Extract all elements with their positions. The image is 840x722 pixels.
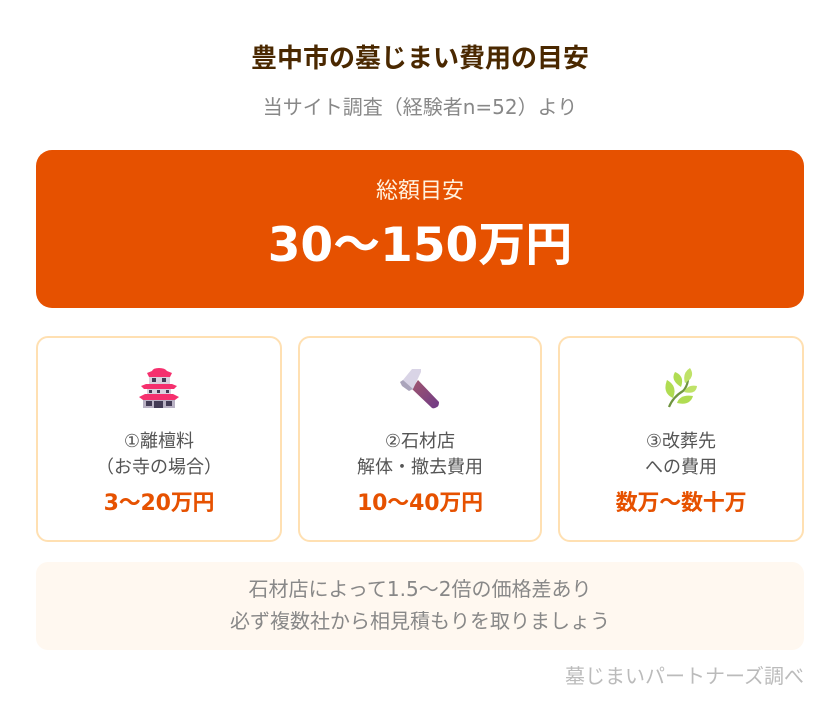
card 1 label (96, 431, 222, 478)
panel: card 2 stonemason (298, 336, 542, 542)
total label: 総額目安 (376, 179, 464, 204)
card 1 label: ①離檀料 (124, 431, 194, 452)
icon: herb (665, 368, 697, 408)
note text (230, 577, 610, 633)
total amount: 30〜150万円 (268, 218, 572, 273)
icon: hammer (400, 369, 439, 408)
card 3 amount: 数万〜数十万 (616, 491, 746, 516)
source credit: 墓じまいパートナーズ調べ (565, 664, 804, 688)
title: 豊中市の墓じまい費用の目安 (251, 44, 589, 74)
card 2 label (357, 431, 483, 478)
note text: 必ず複数社から相見積もりを取りましょう (230, 609, 610, 633)
card 1 label: （お寺の場合） (96, 457, 222, 478)
card 1 amount: 3〜20万円 (104, 491, 214, 516)
callout: price difference note (36, 562, 804, 650)
card 2 label: ②石材店 (385, 431, 455, 452)
panel: total estimate (36, 150, 804, 308)
panel: card 3 new resting place (558, 336, 804, 542)
subtitle: 当サイト調査（経験者n=52）より (263, 95, 577, 119)
panel: card 1 temple leaving fee (36, 336, 282, 542)
note text: 石材店によって1.5〜2倍の価格差あり (249, 577, 591, 601)
card 2 label: 解体・撤去費用 (357, 457, 483, 478)
card 2 amount: 10〜40万円 (357, 491, 483, 516)
icon: pagoda (139, 368, 179, 408)
card 3 label: ③改葬先 (646, 431, 716, 452)
card 3 label: への費用 (645, 457, 717, 478)
card 3 label (645, 431, 717, 478)
